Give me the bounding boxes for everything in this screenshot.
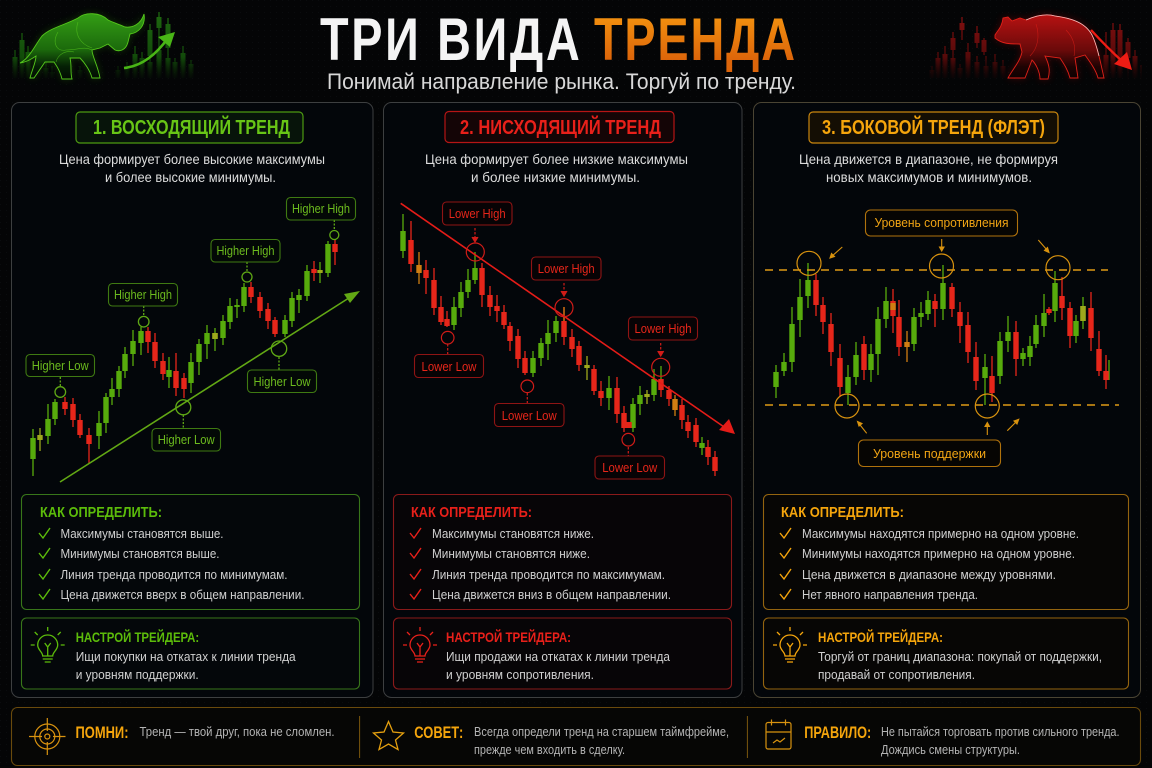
label: Lower Low: Lower Low [422, 360, 477, 374]
tip: remember [29, 718, 334, 755]
label: Higher Low [152, 428, 220, 451]
box: how to identify, sideways: КАК ОПРЕДЕЛИТЬ: [781, 504, 904, 521]
box: trader mindset, sideways [764, 618, 1128, 689]
box: how to identify, sideways [764, 494, 1128, 610]
description: sideways [799, 151, 1058, 185]
description: uptrend [59, 151, 325, 185]
description: sideways: Цена движется в диапазоне, не формируя [799, 151, 1058, 167]
arrows: pointers to levels [830, 239, 1049, 435]
heading: downtrend: 2. НИСХОДЯЩИЙ ТРЕНД [460, 115, 661, 139]
trendline arrow: uptrend [60, 291, 360, 482]
description: downtrend: и более низкие минимумы. [471, 169, 640, 185]
support line [765, 404, 1119, 406]
tip: advice: прежде чем входить в сделку. [474, 743, 625, 757]
label: resistance level: Уровень сопротивления [874, 215, 1008, 230]
label: Higher Low [26, 354, 94, 376]
label: Lower Low [414, 354, 484, 378]
title: ТРЕНДА [594, 6, 795, 73]
panel: sideways trend [754, 102, 1140, 698]
description: uptrend: Цена формирует более высокие максимумы [59, 151, 325, 167]
label: Higher High: Higher High [216, 244, 275, 258]
box: trader mindset, uptrend: НАСТРОЙ ТРЕЙДЕРА: [76, 628, 199, 645]
bottom bar [12, 708, 1140, 766]
heading: downtrend [445, 112, 674, 142]
box: how to identify, uptrend: Минимумы становятся выше. [60, 546, 220, 561]
box: how to identify, sideways: Максимумы находятся примерно на одном уровне. [802, 526, 1079, 541]
heading: sideways [809, 112, 1058, 143]
tip: remember: ПОМНИ: [76, 723, 128, 742]
icon: star [374, 722, 404, 750]
box: how to identify, downtrend: Минимумы становятся ниже. [432, 546, 590, 561]
label: Lower Low [494, 404, 564, 426]
markers: uptrend swing points [55, 220, 339, 428]
trendline arrow: downtrend [401, 203, 735, 434]
title [320, 6, 795, 73]
panel: downtrend [384, 102, 742, 698]
box: trader mindset, sideways: НАСТРОЙ ТРЕЙДЕРА: [818, 628, 943, 645]
box: trader mindset, sideways: продавай от сопротивления. [818, 667, 975, 682]
tip: rule: Не пытайся торговать против сильного тренда. [881, 725, 1120, 739]
tip: advice: Всегда определи тренд на старшем таймфрейме, [474, 725, 729, 739]
box: how to identify, sideways: Минимумы находятся примерно на одном уровне. [802, 546, 1075, 561]
box: how to identify, sideways: Нет явного направления тренда. [802, 587, 978, 602]
box: how to identify, uptrend: КАК ОПРЕДЕЛИТЬ: [40, 504, 162, 521]
label: Higher High: Higher High [292, 202, 350, 216]
resistance line [765, 269, 1108, 271]
label: Higher Low [248, 370, 316, 392]
description: uptrend: и более высокие минимумы. [105, 169, 276, 185]
label: Lower Low: Lower Low [502, 409, 558, 423]
box: trader mindset, uptrend: Ищи покупки на откатах к линии тренда [76, 649, 296, 664]
label: Lower High [532, 257, 601, 280]
label: Higher Low: Higher Low [32, 359, 90, 373]
chart: sideways candles [776, 263, 1109, 405]
icon: bull with rising arrow [15, 12, 191, 80]
icon: light bulb [403, 627, 437, 662]
label: Higher Low: Higher Low [158, 433, 216, 447]
box: how to identify, uptrend: Цена движется вверх в общем направлении. [60, 587, 304, 602]
label: support level [858, 440, 1000, 466]
tip: advice [374, 722, 729, 757]
label: Higher High [211, 240, 280, 262]
heading: uptrend: 1. ВОСХОДЯЩИЙ ТРЕНД [93, 115, 290, 139]
label: Lower High: Lower High [449, 207, 506, 221]
box: trader mindset, downtrend: НАСТРОЙ ТРЕЙДЕРА: [446, 628, 571, 645]
icon: bear with falling arrow [932, 15, 1141, 80]
description: downtrend [425, 151, 688, 185]
label: support level: Уровень поддержки [873, 446, 986, 461]
panel: uptrend [12, 102, 373, 698]
label: resistance level [866, 210, 1018, 236]
box: how to identify, uptrend [22, 494, 360, 610]
box: trader mindset, sideways: Торгуй от границ диапазона: покупай от поддержки, [818, 649, 1102, 664]
markers: sideways touch points [797, 251, 1070, 418]
icon: light bulb [31, 627, 65, 662]
box: how to identify, downtrend [394, 494, 732, 610]
heading: sideways: 3. БОКОВОЙ ТРЕНД (ФЛЭТ) [822, 115, 1045, 139]
box: trader mindset, downtrend [394, 618, 732, 689]
markers: downtrend swing points [441, 228, 670, 456]
box: how to identify, sideways: Цена движется в диапазоне между уровнями. [802, 567, 1056, 582]
box: trader mindset, downtrend: Ищи продажи на откатах к линии тренда [446, 649, 671, 664]
description: downtrend: Цена формирует более низкие максимумы [425, 151, 688, 167]
box: trader mindset, uptrend: и уровням поддержки. [76, 667, 199, 682]
tip: remember: Тренд — твой друг, пока не сломлен. [140, 725, 334, 739]
tip: rule [766, 720, 1120, 757]
label: Lower High: Lower High [634, 322, 692, 336]
heading: uptrend [76, 112, 303, 143]
label: Lower High [442, 202, 512, 225]
tip: rule: ПРАВИЛО: [804, 723, 871, 742]
description: sideways: новых максимумов и минимумов. [826, 169, 1032, 185]
label: Lower High [628, 317, 698, 340]
box: how to identify, uptrend: Максимумы становятся выше. [60, 526, 224, 541]
label: Lower High: Lower High [538, 262, 595, 276]
label: Higher Low: Higher Low [254, 375, 311, 389]
subtitle: Понимай направление рынка. Торгуй по тренду. [327, 69, 796, 94]
box: trader mindset, uptrend [22, 618, 360, 689]
label: Lower Low [595, 456, 664, 479]
chart: downtrend candles [403, 214, 715, 476]
label: Lower Low: Lower Low [602, 461, 658, 475]
box: how to identify, downtrend: Максимумы становятся ниже. [432, 526, 594, 541]
label: Higher High [108, 284, 178, 306]
tip: advice: СОВЕТ: [414, 723, 463, 742]
icon: light bulb [773, 627, 807, 662]
box: how to identify, downtrend: КАК ОПРЕДЕЛИТЬ: [411, 504, 532, 521]
box: how to identify, uptrend: Линия тренда проводится по минимумам. [60, 567, 288, 582]
box: how to identify, downtrend: Цена движется вниз в общем направлении. [432, 587, 671, 602]
box: how to identify, downtrend: Линия тренда проводится по максимумам. [432, 567, 665, 582]
box: trader mindset, downtrend: и уровням сопротивления. [446, 667, 594, 682]
chart: uptrend candles [33, 239, 335, 476]
tip: rule: Дождись смены структуры. [881, 743, 1020, 757]
label: Higher High: Higher High [114, 288, 172, 302]
title: ТРИ ВИДА [320, 6, 580, 73]
icon: target [29, 718, 66, 755]
label: Higher High [286, 198, 356, 220]
icon: calendar [766, 720, 791, 749]
